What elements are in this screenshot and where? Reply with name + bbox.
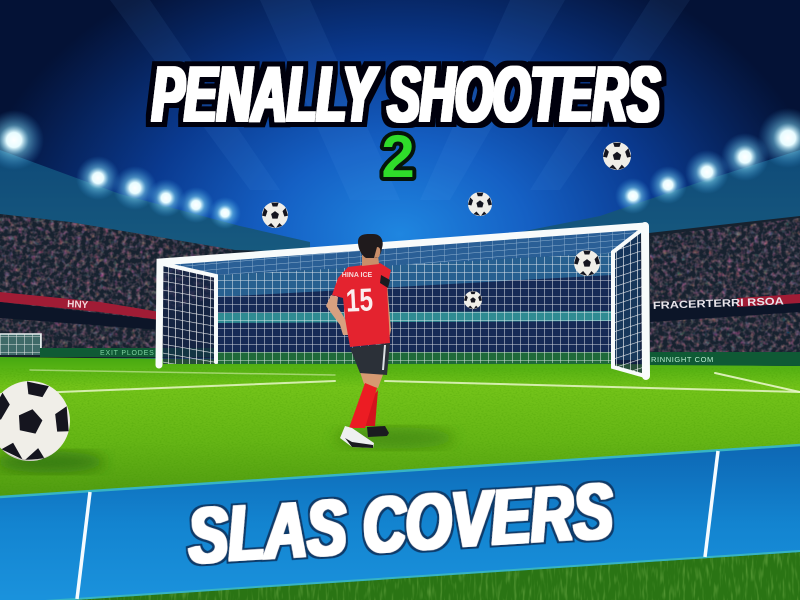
left stand banner text: HNY (67, 299, 89, 311)
panel: pitch grass (0, 357, 800, 510)
banner divider left (77, 492, 90, 599)
neck (362, 255, 379, 266)
left arm (326, 295, 349, 335)
soccer ball: top right (603, 142, 631, 170)
front sock (349, 383, 377, 428)
small training goal (0, 334, 41, 355)
shirt number: 15 (345, 281, 374, 319)
big soccer ball (0, 374, 77, 468)
floodlights left (0, 110, 241, 229)
sky background (0, 0, 800, 300)
shirt name: HINA ICE (342, 272, 373, 279)
goal (159, 226, 646, 376)
soccer ball: top centre (468, 192, 492, 216)
goal frame (159, 226, 646, 376)
lower grass (0, 540, 800, 600)
shirt (332, 263, 391, 347)
left ad board text: EXIT PLODES (100, 350, 155, 357)
back sock (365, 390, 378, 426)
player (326, 234, 391, 448)
legs (360, 372, 384, 388)
shorts (350, 343, 390, 375)
panel: stadium stands left (0, 150, 310, 360)
back boot (367, 426, 389, 437)
soccer ball: in goal right (574, 250, 600, 276)
head (358, 234, 383, 258)
banner caption: SLAS COVERS (186, 466, 615, 580)
title (152, 50, 660, 190)
light beams (110, 0, 690, 200)
soccer ball: mid left (262, 202, 288, 228)
big ball shadow (0, 451, 105, 473)
player shadow (335, 427, 455, 449)
title numeral: 2 (381, 123, 415, 190)
armband (380, 275, 390, 288)
floodlights right (615, 108, 800, 214)
pitch lines (0, 370, 800, 394)
front boot (340, 426, 374, 448)
panel: blue banner (0, 445, 800, 600)
panel: ad boards (40, 348, 800, 366)
right stand banner text: FRACERTERRI RSOA (653, 295, 785, 312)
soccer ball: in goal centre (464, 291, 482, 309)
net (163, 228, 645, 376)
banner divider right (705, 451, 718, 557)
panel: stadium stands right (490, 150, 800, 360)
right ad board text: RINNIGHT COM (651, 355, 714, 364)
right arm (378, 282, 391, 343)
